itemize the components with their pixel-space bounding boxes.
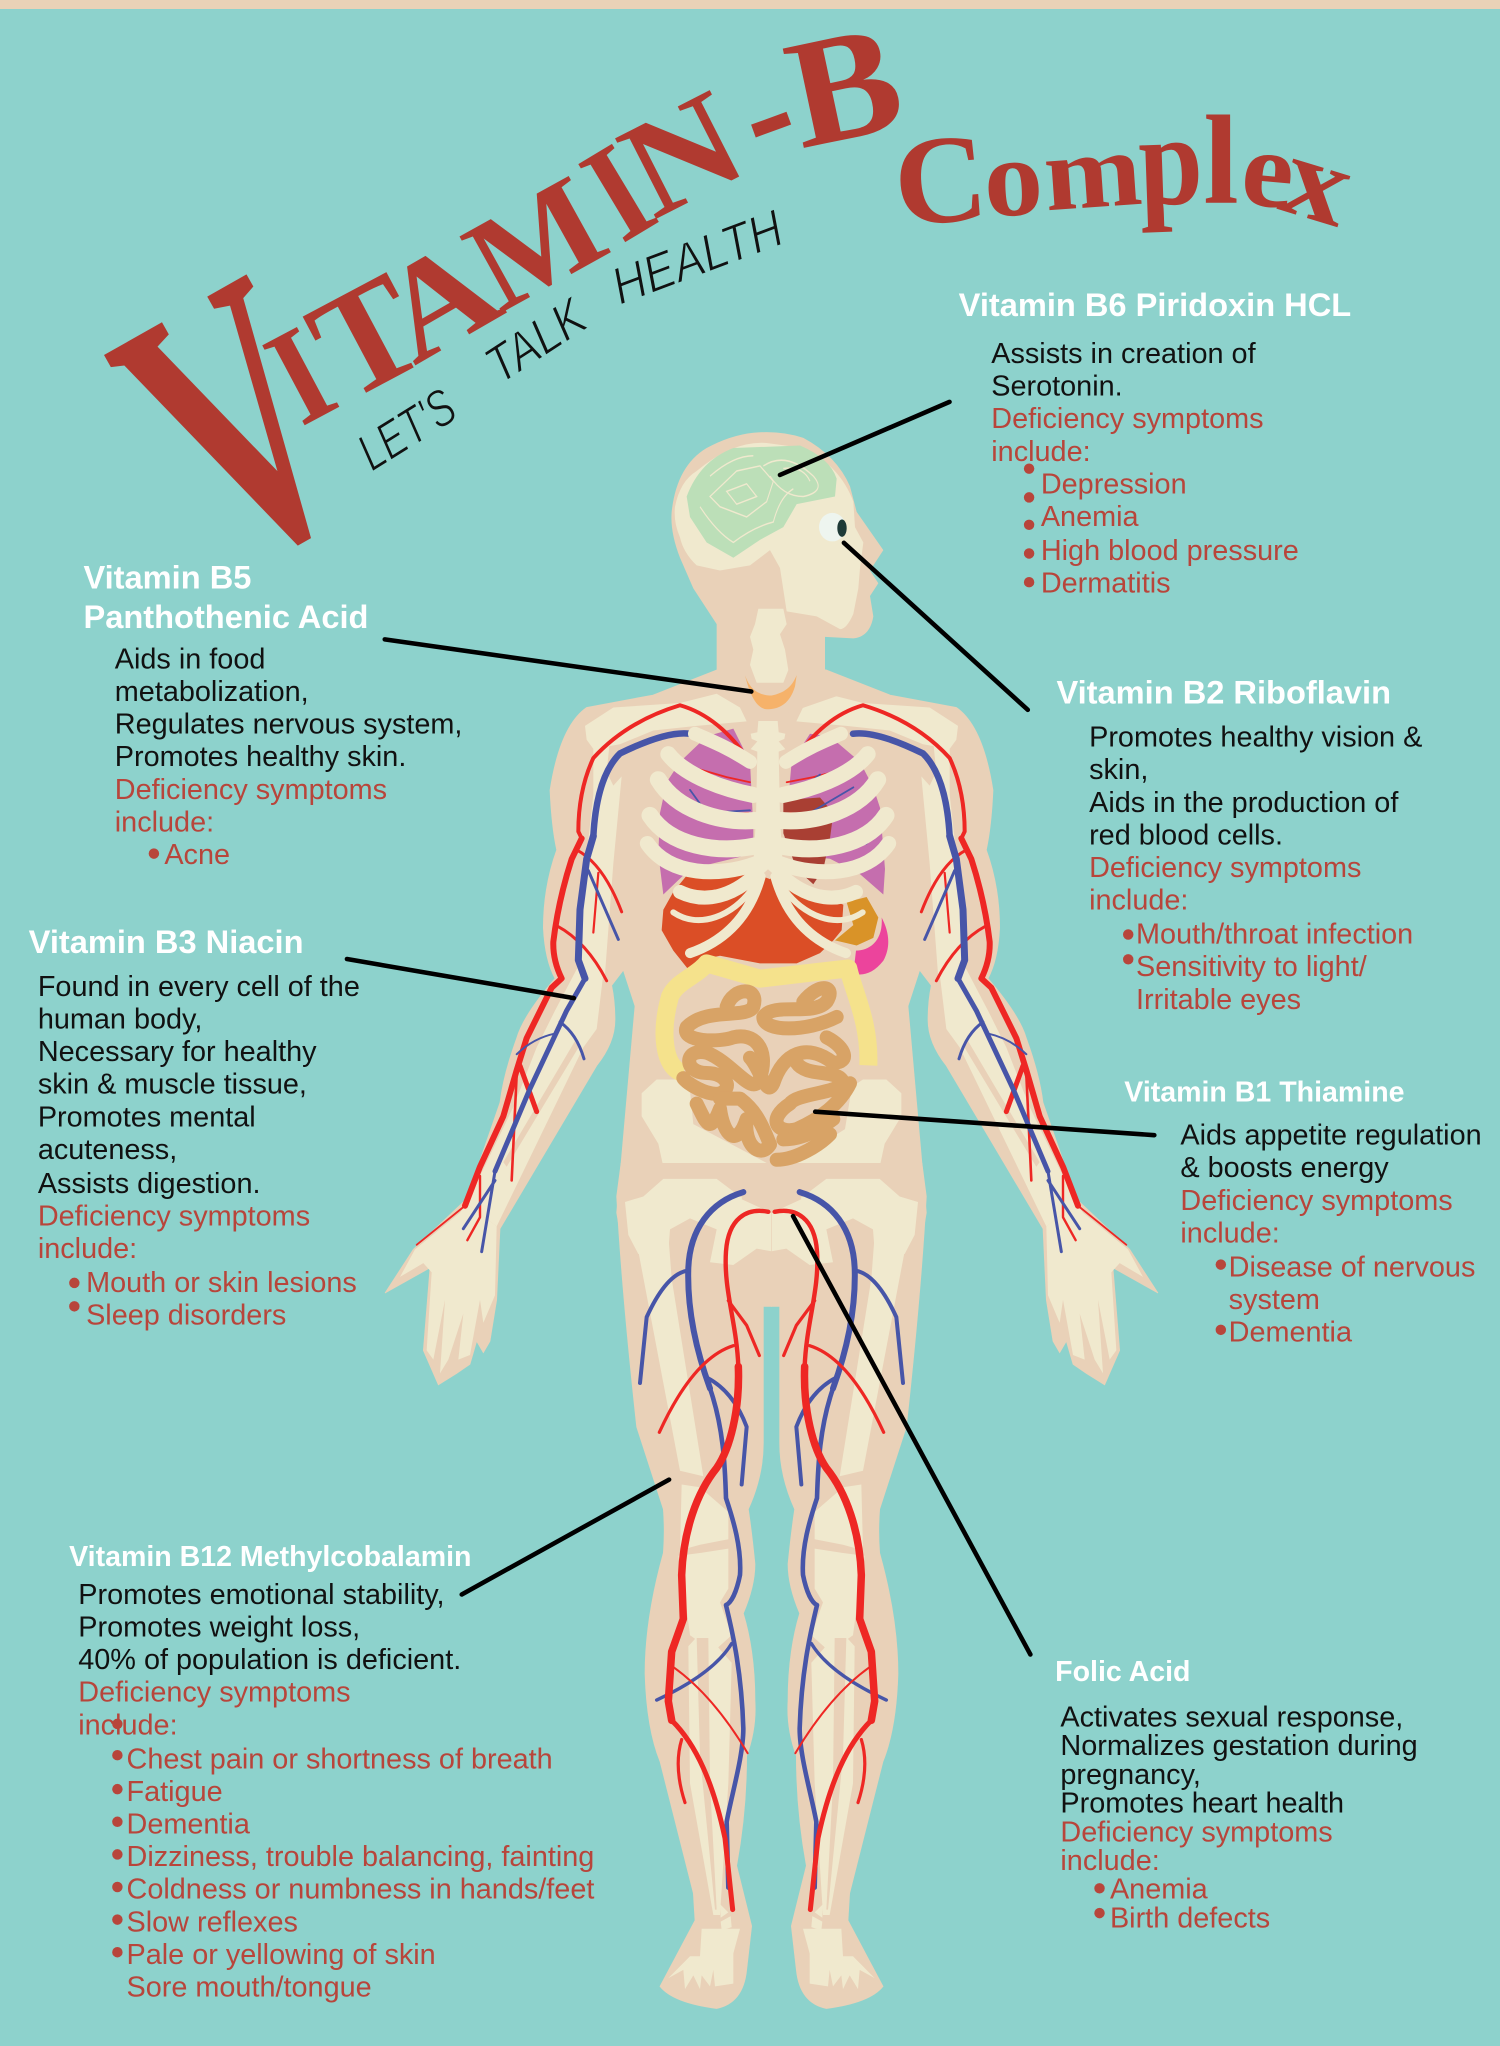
panel: Folic Acid: Anemia — [1110, 1874, 1209, 1906]
panel: Vitamin B12: Promotes weight loss, — [78, 1611, 360, 1643]
eye — [819, 513, 847, 541]
panel: Vitamin B12: Dementia — [127, 1809, 251, 1841]
title: Complex — [888, 87, 1368, 254]
panel: Vitamin B5 — [83, 559, 462, 871]
callout lines — [347, 402, 1154, 1654]
panel: Vitamin B3: include: — [38, 1233, 137, 1265]
panel: Vitamin B3: acuteness, — [38, 1134, 177, 1166]
panel: Vitamin B1: include: — [1180, 1217, 1280, 1249]
liver and diaphragm — [662, 870, 843, 974]
panel: Folic Acid: Folic Acid — [1055, 1656, 1191, 1688]
panel: Vitamin B3 — [29, 923, 360, 1332]
panel: Vitamin B1: Deficiency symptoms — [1180, 1185, 1453, 1217]
panel: Vitamin B3: Promotes mental — [38, 1101, 256, 1133]
panel: Vitamin B5: Aids in food — [115, 643, 265, 675]
subtitle: Let's talk health — [348, 199, 791, 482]
lungs — [658, 729, 753, 894]
panel: Vitamin B12: Fatigue — [127, 1776, 223, 1808]
panel: Vitamin B6: include: — [991, 436, 1091, 468]
panel: Vitamin B2: skin, — [1089, 754, 1148, 786]
panel: Folic Acid: pregnancy, — [1060, 1759, 1201, 1791]
title: Complex: e — [1237, 108, 1299, 232]
subtitle: Let's talk health: LET'S — [348, 378, 467, 482]
stomach — [835, 897, 878, 946]
panel: Vitamin B2: Aids in the production of — [1089, 787, 1399, 819]
title: Vitamin-B: - — [713, 19, 819, 202]
panel: Vitamin B12: Coldness or numbness in hands/feet — [127, 1874, 594, 1906]
panel: Vitamin B5: Promotes healthy skin. — [115, 741, 406, 773]
panel: Vitamin B3: Sleep disorders — [86, 1300, 286, 1332]
panel: Vitamin B2: Sensitivity to light/ — [1136, 951, 1368, 983]
title: Complex: C — [888, 107, 992, 254]
panel: Vitamin B5: metabolization, — [115, 676, 309, 708]
panel: Vitamin B5: Acne — [164, 839, 230, 871]
panel: Folic Acid: Deficiency symptoms — [1060, 1816, 1333, 1848]
panel: Vitamin B12: Pale or yellowing of skin — [127, 1939, 436, 1971]
panel: Vitamin B3: Assists digestion. — [38, 1168, 261, 1200]
panel: Vitamin B6: Deficiency symptoms — [991, 403, 1264, 435]
title: Complex: x — [1269, 111, 1368, 252]
panel: Vitamin B12: Sore mouth/tongue — [127, 1972, 372, 2004]
panel: Vitamin B1 — [1124, 1077, 1482, 1349]
panel: Vitamin B1: system — [1229, 1284, 1320, 1316]
title: Vitamin-B: N — [598, 60, 766, 247]
panel: Vitamin B12: Chest pain or shortness of breath — [127, 1743, 553, 1775]
panel: Vitamin B1: Vitamin B1 Thiamine — [1124, 1077, 1405, 1109]
cervical spine — [750, 609, 788, 683]
panel: Vitamin B3: skin & muscle tissue, — [38, 1069, 307, 1101]
panel: Vitamin B6: Depression — [1041, 468, 1187, 500]
heart — [783, 798, 833, 884]
subtitle: Let's talk health: HEALTH — [604, 199, 791, 316]
panel: Vitamin B2: include: — [1089, 885, 1188, 917]
panel: Folic Acid: Activates sexual response, — [1060, 1702, 1403, 1734]
circulatory system: arteries and veins — [417, 705, 1126, 1910]
panel: Vitamin B12: Dizziness, trouble balancing, fainting — [127, 1841, 594, 1873]
panel: Folic Acid: Birth defects — [1110, 1902, 1270, 1934]
panel: Vitamin B12: Promotes emotional stability, — [78, 1579, 445, 1611]
panel: Vitamin B12: 40% of population is deficient. — [78, 1644, 461, 1676]
panel: Folic Acid — [1055, 1656, 1418, 1934]
panel: Vitamin B5: include: — [115, 806, 214, 838]
panel: Vitamin B5: Deficiency symptoms — [115, 774, 387, 806]
panel: Vitamin B2: Promotes healthy vision & — [1089, 722, 1422, 754]
panel: Vitamin B2: Deficiency symptoms — [1089, 852, 1361, 884]
panel: Vitamin B1: & boosts energy — [1180, 1152, 1389, 1184]
panel: Folic Acid: include: — [1060, 1845, 1160, 1877]
panel: Vitamin B6: Serotonin. — [991, 371, 1123, 403]
panel: Vitamin B2: Mouth/throat infection — [1136, 919, 1413, 951]
spleen — [853, 917, 888, 974]
panel: Vitamin B12 — [69, 1541, 594, 2004]
title: Vitamin-B: M — [443, 148, 629, 339]
panel: Vitamin B5: Regulates nervous system, — [115, 709, 462, 741]
top border strip — [0, 0, 1500, 9]
title: Vitamin-B: A — [353, 207, 523, 392]
title: Complex: p — [1136, 87, 1205, 234]
lung vessels — [672, 736, 870, 854]
title: Vitamin-B: T — [285, 241, 449, 432]
panel: Vitamin B3: Necessary for healthy — [38, 1036, 317, 1068]
panel: Vitamin B2: Irritable eyes — [1136, 984, 1301, 1016]
panel: Vitamin B1: Disease of nervous — [1229, 1251, 1475, 1283]
panel: Vitamin B2: red blood cells. — [1089, 819, 1283, 851]
panel: Vitamin B3: Found in every cell of the — [38, 971, 360, 1003]
panel: Vitamin B12: Vitamin B12 Methylcobalamin — [69, 1541, 471, 1573]
rib cage — [647, 721, 889, 953]
panel: Folic Acid: Normalizes gestation during — [1060, 1730, 1418, 1762]
thyroid — [745, 675, 797, 709]
title: Complex: l — [1203, 91, 1239, 231]
panel: Vitamin B12: Slow reflexes — [127, 1906, 298, 1938]
panel: Vitamin B3: Vitamin B3 Niacin — [29, 923, 304, 960]
panel: Vitamin B12: Deficiency symptoms — [78, 1677, 351, 1709]
title: Complex: m — [1040, 111, 1145, 234]
panel: Vitamin B6 — [959, 286, 1351, 600]
human body: skin and skeleton — [385, 670, 1158, 2008]
panel: Vitamin B6: Assists in creation of — [991, 338, 1257, 370]
panel: Vitamin B12: include: — [78, 1709, 178, 1741]
brain — [687, 446, 837, 558]
panel: Vitamin B6: Dermatitis — [1041, 568, 1171, 600]
head with skull, brain and eye — [671, 432, 883, 716]
panel: Vitamin B3: Mouth or skin lesions — [86, 1267, 357, 1299]
title: Vitamin-B: V — [56, 192, 416, 652]
panel: Vitamin B2: Vitamin B2 Riboflavin — [1056, 674, 1391, 711]
subtitle: Let's talk health: TALK — [475, 287, 599, 395]
panel: Vitamin B3: human body, — [38, 1003, 202, 1035]
panel: Vitamin B1: Aids appetite regulation — [1180, 1120, 1482, 1152]
intestines — [665, 963, 868, 1170]
panel: Vitamin B5: Panthothenic Acid — [83, 598, 368, 635]
panel: Vitamin B5: Vitamin B5 — [83, 559, 251, 596]
panel: Vitamin B6: High blood pressure — [1041, 535, 1299, 567]
panel: Vitamin B6: Anemia — [1041, 501, 1140, 533]
panel: Vitamin B3: Deficiency symptoms — [38, 1200, 310, 1232]
internal organs — [658, 729, 888, 1170]
panel: Vitamin B6: Vitamin B6 Piridoxin HCL — [959, 286, 1351, 323]
panel: Folic Acid: Promotes heart health — [1060, 1788, 1344, 1820]
title: Vitamin-B: I — [244, 297, 357, 454]
title: Complex: o — [980, 115, 1046, 241]
panel: Vitamin B1: Dementia — [1229, 1317, 1353, 1349]
title: Vitamin-B: I — [558, 114, 678, 271]
panel: Vitamin B2 — [1056, 674, 1422, 1016]
title: Vitamin-B — [56, 0, 916, 652]
